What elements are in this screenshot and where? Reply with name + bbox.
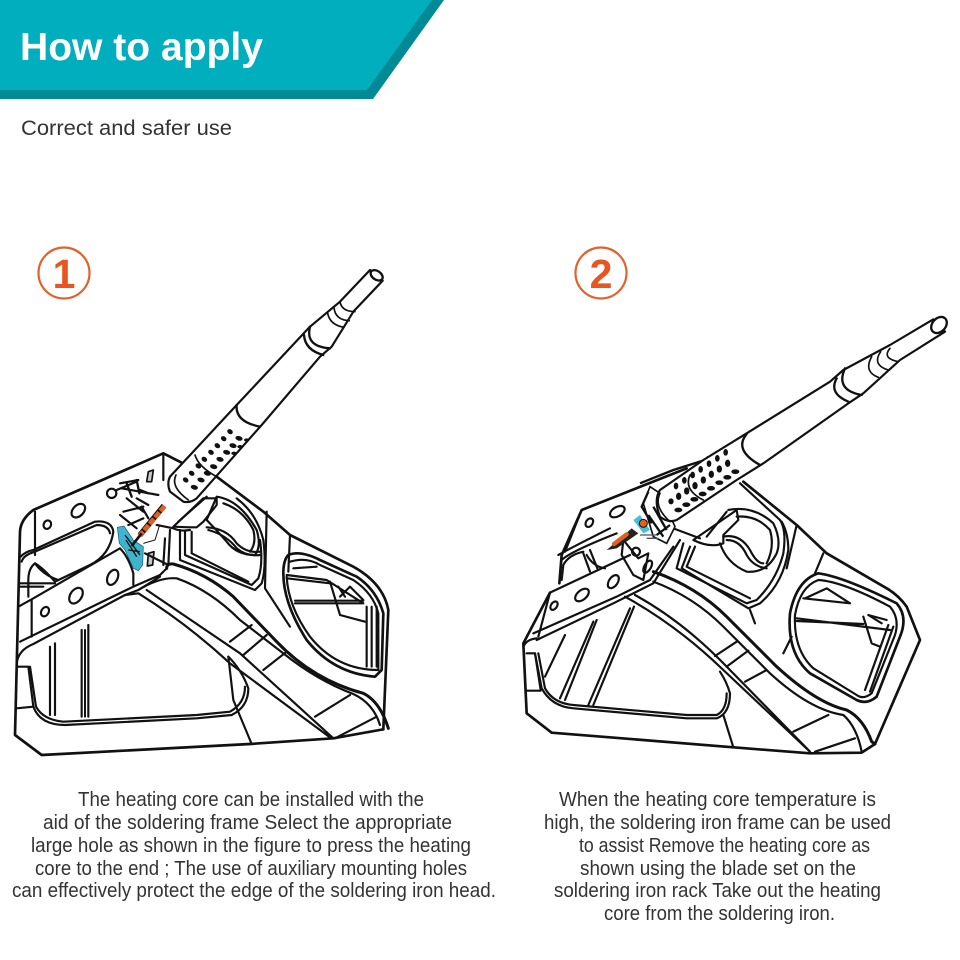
description: step 1: aid of the soldering frame Select the appropriate <box>43 812 452 834</box>
subtitle: Correct and safer use <box>21 117 232 140</box>
description: step 1: can effectively protect the edge of the soldering iron head. <box>12 880 496 902</box>
description: step 1 <box>12 789 496 902</box>
orange heating core <box>140 506 164 535</box>
illustration 1: soldering iron in stand <box>12 268 950 925</box>
description: step 2: soldering iron rack Take out the heating <box>554 880 881 902</box>
stand 1 <box>15 453 388 755</box>
stand 2 <box>523 468 920 753</box>
description: step 2: shown using the blade set on the <box>580 858 856 880</box>
description: step 2 <box>544 789 891 925</box>
step number 1: 1 <box>53 251 75 297</box>
description: step 2: When the heating core temperature is <box>559 789 876 811</box>
header banner <box>0 0 444 99</box>
description: step 2: high, the soldering iron frame can be used <box>544 812 891 834</box>
step number 1 <box>38 248 90 298</box>
soldering iron 1 <box>168 268 385 502</box>
description: step 1: core to the end ; The use of auxiliary mounting holes <box>35 858 467 880</box>
orange heating core and blue blade <box>633 515 650 533</box>
blue cooling blade <box>117 526 143 571</box>
step number 2: 2 <box>590 251 612 297</box>
description: step 2: core from the soldering iron. <box>604 903 835 925</box>
illustration 2: soldering iron and stand removing core <box>523 314 950 753</box>
description: step 2: to assist Remove the heating core as <box>579 835 870 857</box>
step number 2 <box>576 248 626 298</box>
title: How to apply <box>20 26 263 69</box>
description: step 1: large hole as shown in the figure to press the heating <box>31 835 471 857</box>
description: step 1: The heating core can be installed with the <box>78 789 424 811</box>
soldering iron 2 <box>640 314 950 522</box>
